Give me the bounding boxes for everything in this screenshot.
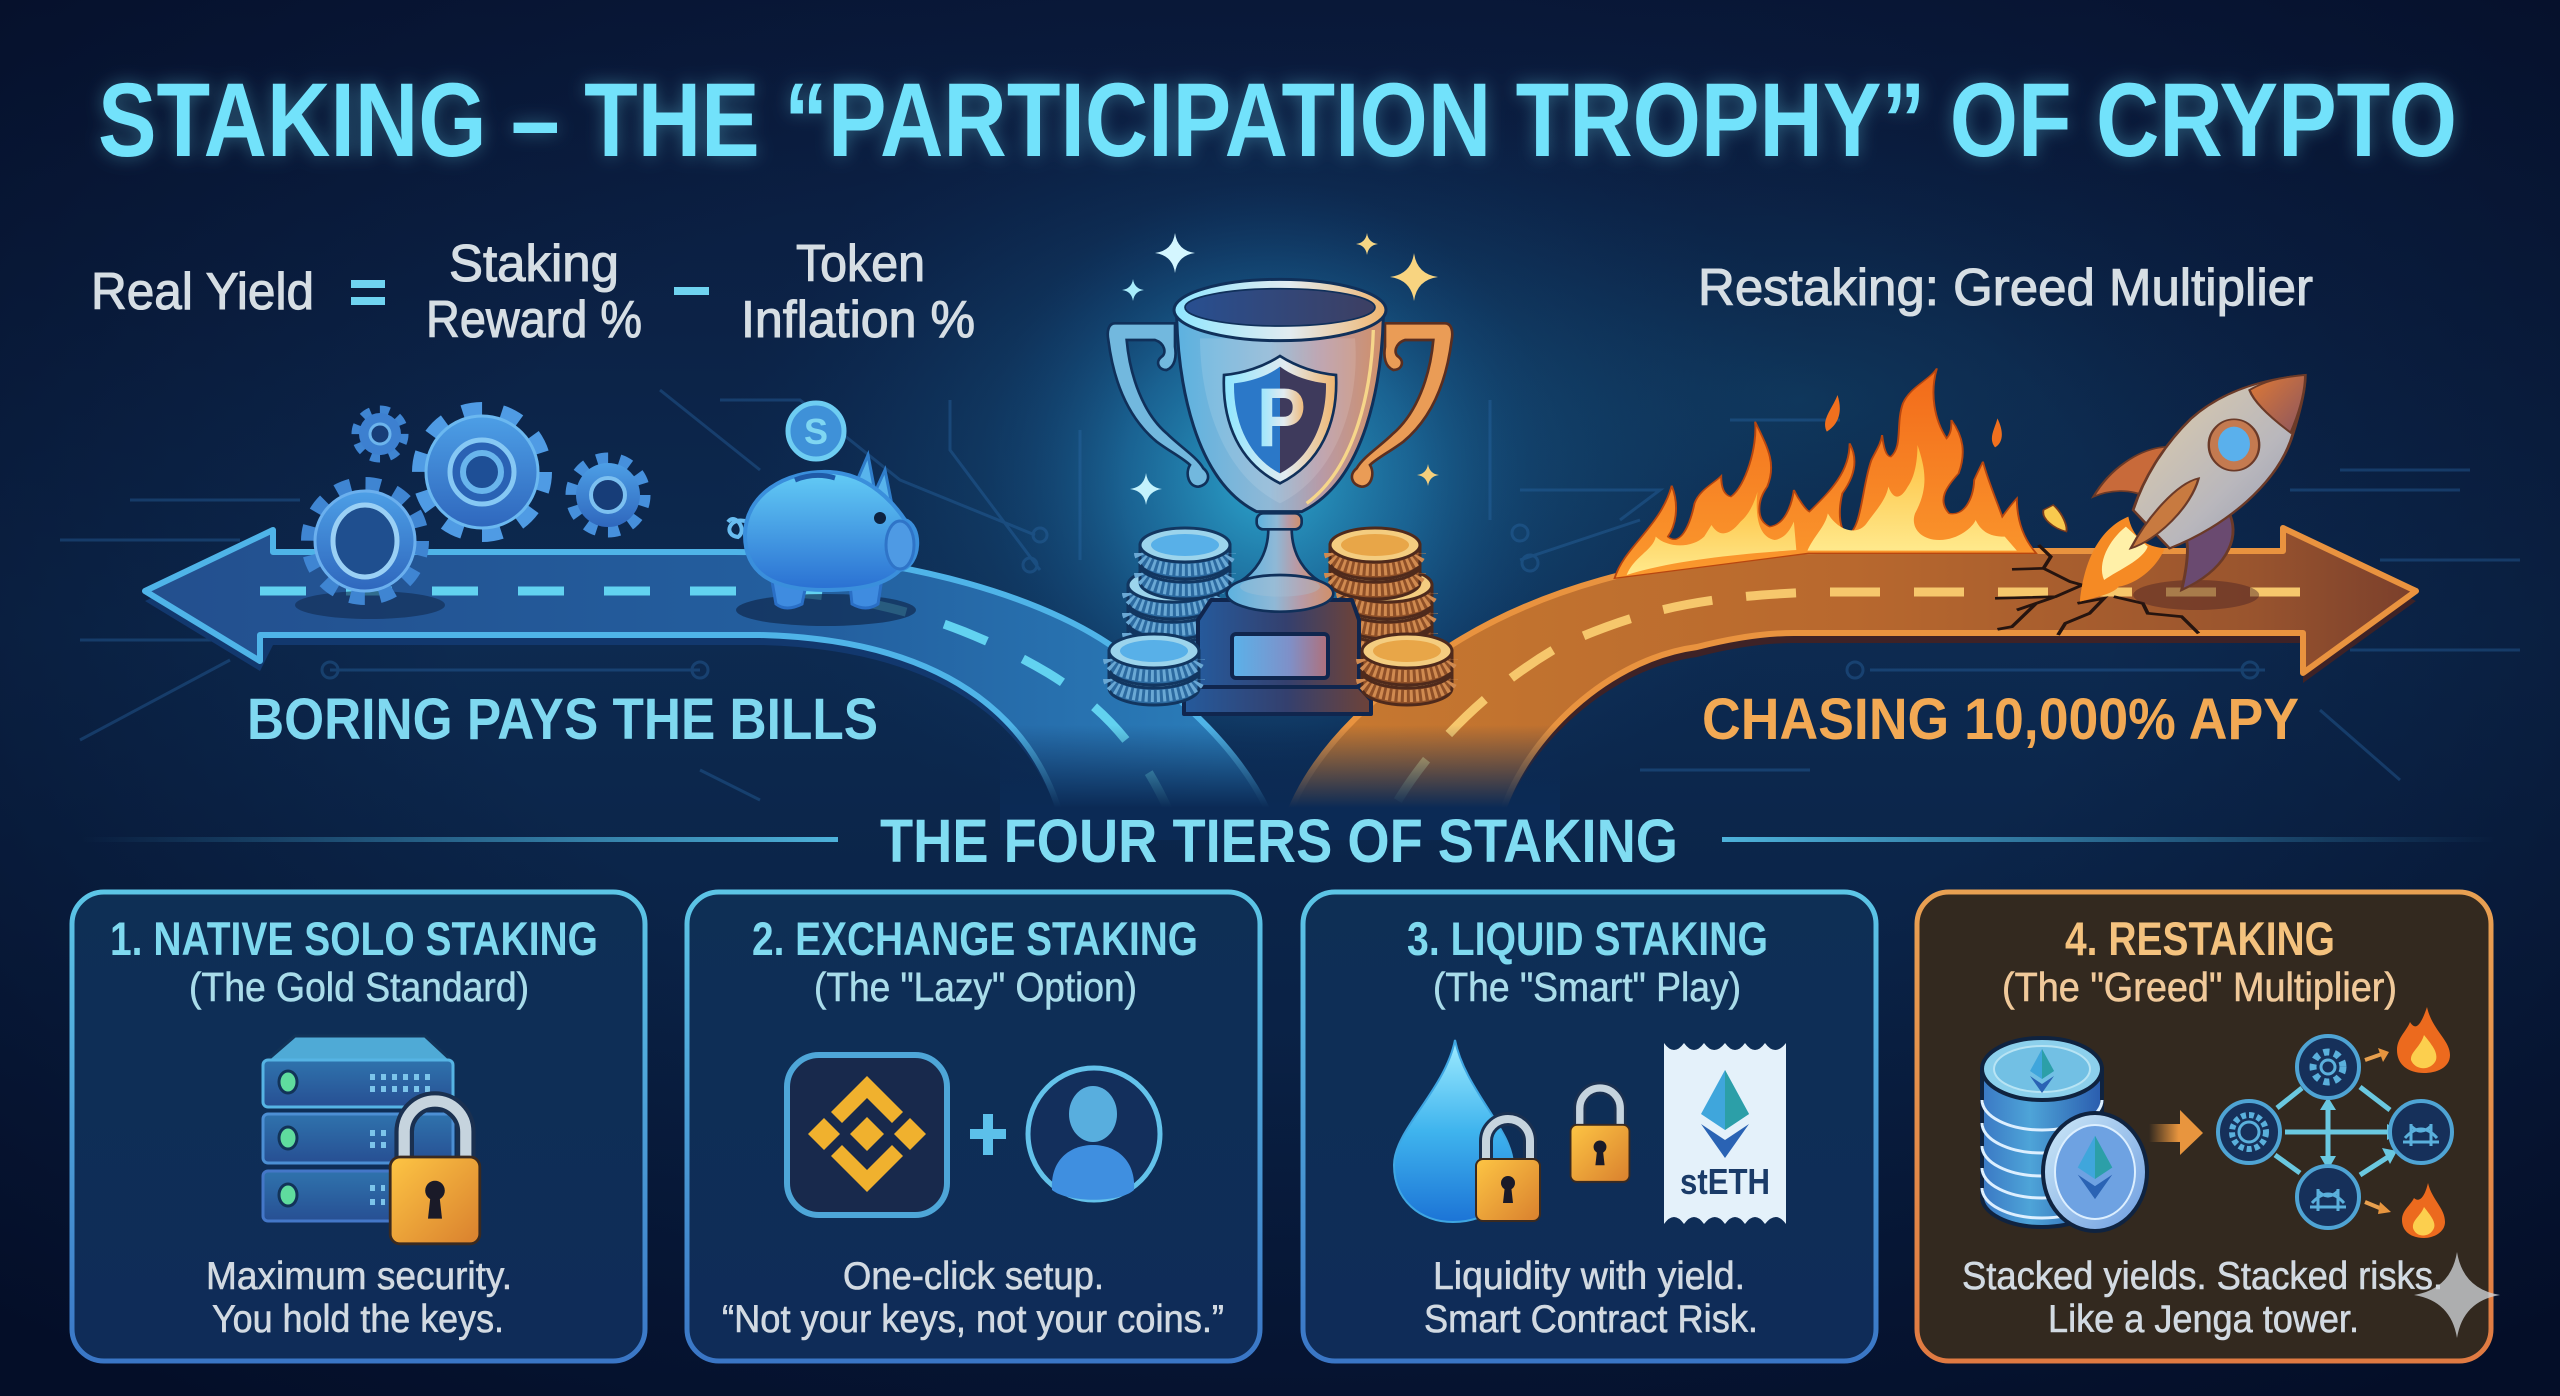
icon: plus [970, 1114, 1006, 1155]
card heading: 4. RESTAKING [2065, 912, 2335, 965]
equals sign [351, 280, 385, 305]
card description: You hold the keys. [212, 1298, 504, 1341]
trophy plaque [1232, 634, 1328, 678]
trophy stem [1227, 513, 1333, 612]
formula: real yield [91, 235, 975, 349]
card description: One-click setup. [843, 1255, 1104, 1298]
icon: water drop with padlock [1394, 1040, 1540, 1222]
icon: stETH ticket [1664, 1043, 1786, 1224]
road fade [1000, 725, 1560, 840]
card description [722, 1255, 1224, 1341]
small arrows to flames [2365, 1048, 2391, 1214]
formula term: staking reward [426, 235, 642, 349]
icon: stETH ticket: stETH [1680, 1161, 1770, 1202]
trophy right handle [1352, 323, 1452, 487]
trophy shield [1224, 356, 1336, 483]
icon: blue coin stack (front) [1109, 634, 1199, 705]
icon: flames [1615, 368, 2036, 578]
icon: rocket [2043, 375, 2305, 610]
icon: exchange logo [787, 1055, 947, 1215]
panel: liquid staking [1303, 892, 1876, 1361]
icon: blue coin stacks (back) [1128, 528, 1230, 659]
trophy cup [1177, 317, 1383, 512]
panel: restaking [1917, 892, 2491, 1361]
icon: trophy [1108, 279, 1452, 612]
formula term: token inflation: Inflation % [741, 291, 975, 349]
icon: restaking network [2218, 1036, 2452, 1228]
formula term: staking reward: Reward % [426, 291, 642, 349]
card description [1424, 1255, 1758, 1341]
card subtitle: (The "Greed" Multiplier) [2002, 964, 2397, 1010]
panel: native solo staking [72, 892, 645, 1361]
card heading: 1. NATIVE SOLO STAKING [110, 912, 598, 965]
card description: Smart Contract Risk. [1424, 1298, 1758, 1341]
road cracks [1995, 545, 2199, 635]
section heading: the four tiers [82, 807, 2496, 875]
card heading: 2. EXCHANGE STAKING [752, 912, 1198, 965]
circuit background lines [60, 390, 2520, 800]
section heading: the four tiers: THE FOUR TIERS OF STAKING [880, 807, 1678, 875]
watermark sparkle [2414, 1252, 2500, 1338]
left road arrow [145, 530, 1275, 835]
card description: “Not your keys, not your coins.” [722, 1298, 1224, 1341]
card description: Like a Jenga tower. [2048, 1298, 2359, 1341]
formula term: token inflation [741, 235, 975, 349]
card heading: 3. LIQUID STAKING [1407, 912, 1768, 965]
card description [206, 1255, 512, 1341]
formula term: staking reward: Staking [449, 235, 619, 293]
card description: Stacked yields. Stacked risks. [1962, 1255, 2443, 1298]
sparkles around trophy [1122, 233, 1439, 505]
icon: risk flames [2397, 1007, 2450, 1238]
icon: piggy bank [728, 403, 917, 626]
left path label: BORING PAYS THE BILLS [247, 687, 878, 752]
formula term: token inflation: Token [796, 235, 925, 293]
card subtitle: (The Gold Standard) [189, 964, 529, 1010]
icon: user avatar [1028, 1068, 1160, 1200]
card subtitle: (The "Smart" Play) [1433, 964, 1741, 1010]
minus sign [674, 287, 709, 295]
right road arrow [1284, 528, 2416, 835]
card description: Liquidity with yield. [1433, 1255, 1745, 1298]
card description [1962, 1255, 2443, 1341]
restaking caption: Restaking: Greed Multiplier [1698, 259, 2313, 317]
card subtitle: (The "Lazy" Option) [814, 964, 1137, 1010]
trophy pedestal [1184, 600, 1371, 714]
icon: token stack [1982, 1038, 2147, 1231]
icon: gears [295, 410, 644, 619]
right path label: CHASING 10,000% APY [1702, 687, 2299, 752]
trophy left handle [1108, 323, 1208, 487]
icon: padlock [1571, 1088, 1629, 1182]
icon: server with padlock [263, 1036, 480, 1244]
panel: exchange staking [687, 892, 1260, 1361]
trophy shield: P [1257, 372, 1306, 465]
arrow: stack to network [2149, 1110, 2203, 1155]
formula term: real yield: Real Yield [91, 263, 314, 321]
card description: Maximum security. [206, 1255, 512, 1298]
icon: gold coin stacks (back) [1330, 528, 1432, 659]
icon: piggy bank: S [804, 411, 828, 452]
icon: gold coin stack (front) [1362, 634, 1452, 705]
